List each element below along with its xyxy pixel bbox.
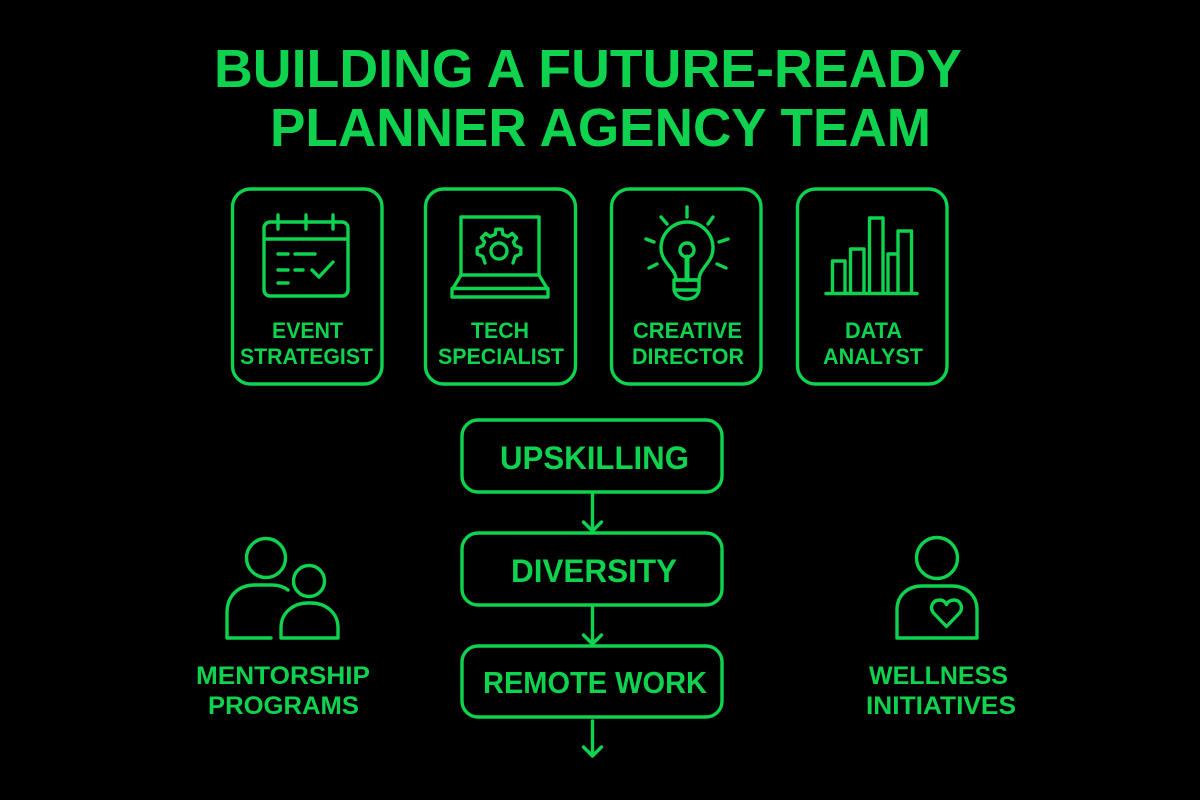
panel: wellness initiatives xyxy=(866,538,1016,720)
label: creative director: DIRECTOR xyxy=(632,344,744,369)
title: PLANNER AGENCY TEAM xyxy=(270,98,931,158)
flow step: diversity xyxy=(462,533,722,605)
icon: calendar with checklist xyxy=(264,215,348,296)
label: tech specialist: TECH xyxy=(471,318,529,343)
flow step: upskilling xyxy=(462,420,722,492)
panel: creative director xyxy=(612,189,761,384)
panel: data analyst xyxy=(798,189,947,384)
label: event strategist: STRATEGIST xyxy=(240,344,374,369)
label: wellness initiatives: INITIATIVES xyxy=(866,692,1016,720)
flow step: upskilling: UPSKILLING xyxy=(500,440,689,476)
title: BUILDING A FUTURE-READY xyxy=(214,39,962,99)
label: wellness initiatives: WELLNESS xyxy=(869,662,1008,690)
label: mentorship programs: MENTORSHIP xyxy=(196,662,370,690)
arrow: diversity to remote work xyxy=(584,606,602,644)
icon: laptop with gear xyxy=(452,217,548,297)
title xyxy=(214,39,962,158)
label: event strategist xyxy=(240,318,374,369)
label: data analyst xyxy=(823,318,924,369)
icon: bar chart xyxy=(826,218,917,294)
panel: mentorship programs xyxy=(196,538,370,720)
icon: light bulb xyxy=(646,207,728,299)
label: creative director xyxy=(632,318,744,369)
icon: person with heart xyxy=(897,538,977,638)
arrow: upskilling to diversity xyxy=(584,493,602,531)
label: tech specialist: SPECIALIST xyxy=(438,344,565,369)
label: wellness initiatives xyxy=(866,662,1016,720)
flow step: diversity: DIVERSITY xyxy=(511,553,677,589)
label: mentorship programs xyxy=(196,662,370,720)
panel: event strategist xyxy=(232,189,382,384)
label: data analyst: ANALYST xyxy=(823,344,924,369)
label: creative director: CREATIVE xyxy=(633,318,742,343)
flow step: remote work: REMOTE WORK xyxy=(483,665,708,700)
label: event strategist: EVENT xyxy=(272,318,344,343)
label: mentorship programs: PROGRAMS xyxy=(208,692,359,720)
label: data analyst: DATA xyxy=(845,318,902,343)
icon: mentor and mentee xyxy=(227,538,338,638)
flow step: remote work xyxy=(462,646,722,717)
label: tech specialist xyxy=(438,318,565,369)
panel: tech specialist xyxy=(426,189,576,384)
arrow: remote work onward xyxy=(584,721,602,756)
